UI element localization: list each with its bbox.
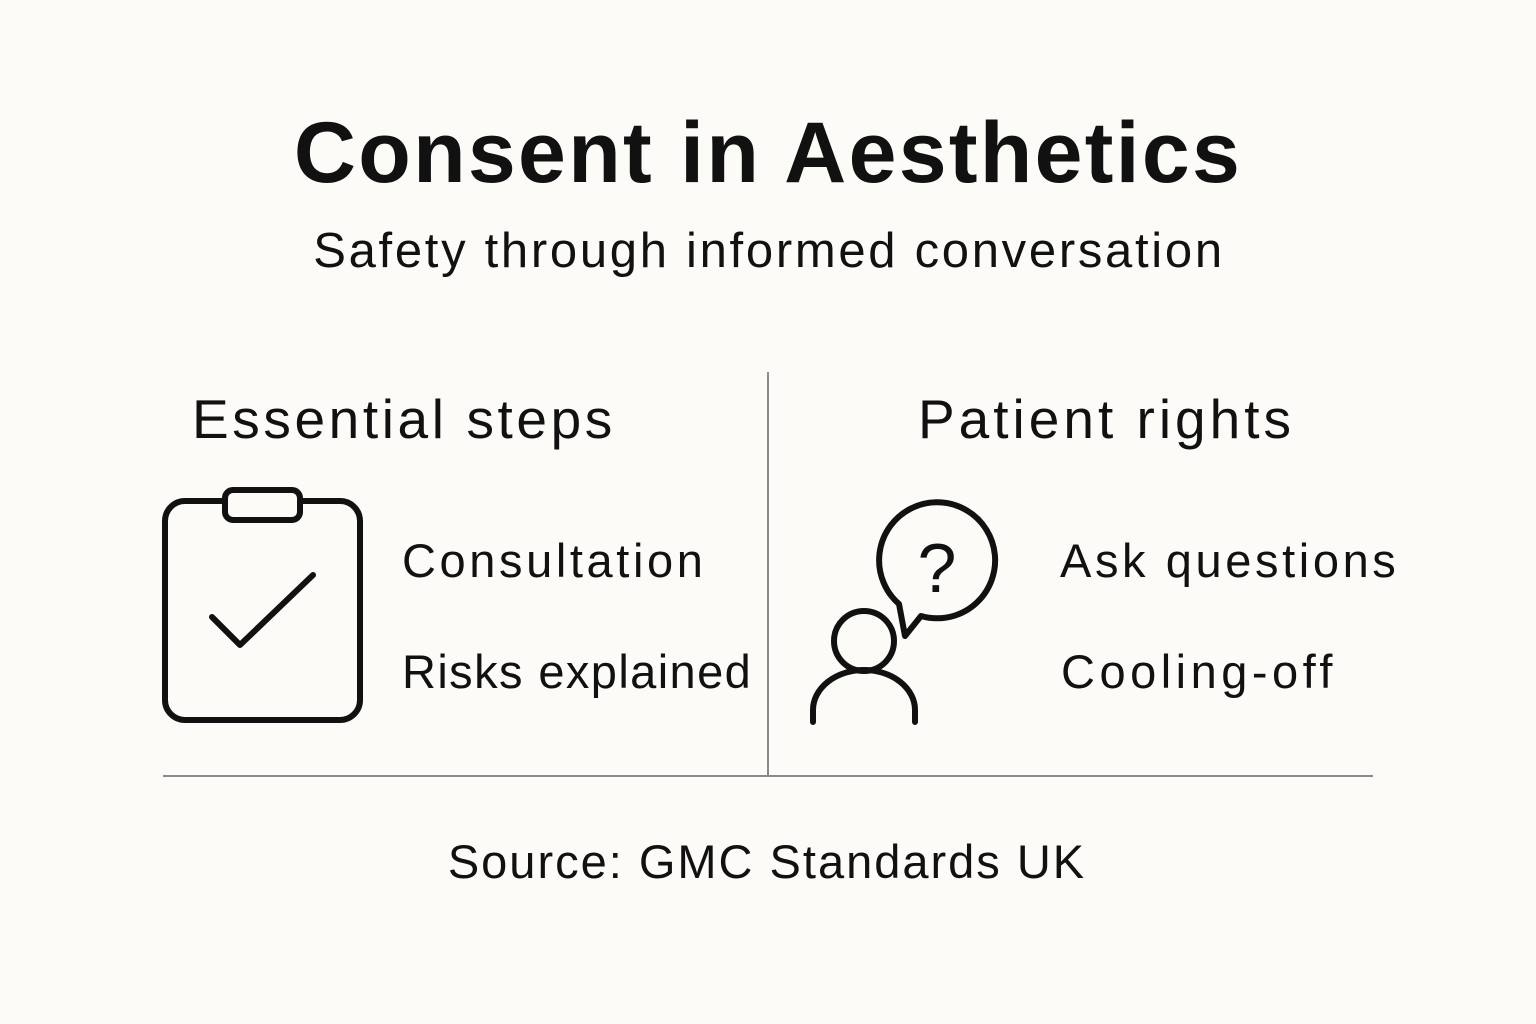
item: consultation: Consultation	[402, 534, 706, 587]
heading: essential steps: Essential steps	[192, 388, 616, 450]
item: risks explained: Risks explained	[402, 645, 752, 698]
icon: clipboard with check	[162, 487, 363, 723]
icon: person with question bubble: ?	[918, 529, 956, 607]
title: Consent in Aesthetics	[294, 105, 1242, 201]
source note: Source: GMC Standards UK	[448, 835, 1086, 888]
heading: patient rights: Patient rights	[918, 388, 1295, 450]
icon: person with question bubble	[810, 499, 998, 725]
item: ask questions: Ask questions	[1060, 534, 1399, 587]
panel: patient rights	[810, 388, 1399, 725]
panel: essential steps	[162, 388, 752, 723]
item: cooling-off: Cooling-off	[1061, 645, 1337, 698]
subtitle: Safety through informed conversation	[313, 224, 1225, 278]
